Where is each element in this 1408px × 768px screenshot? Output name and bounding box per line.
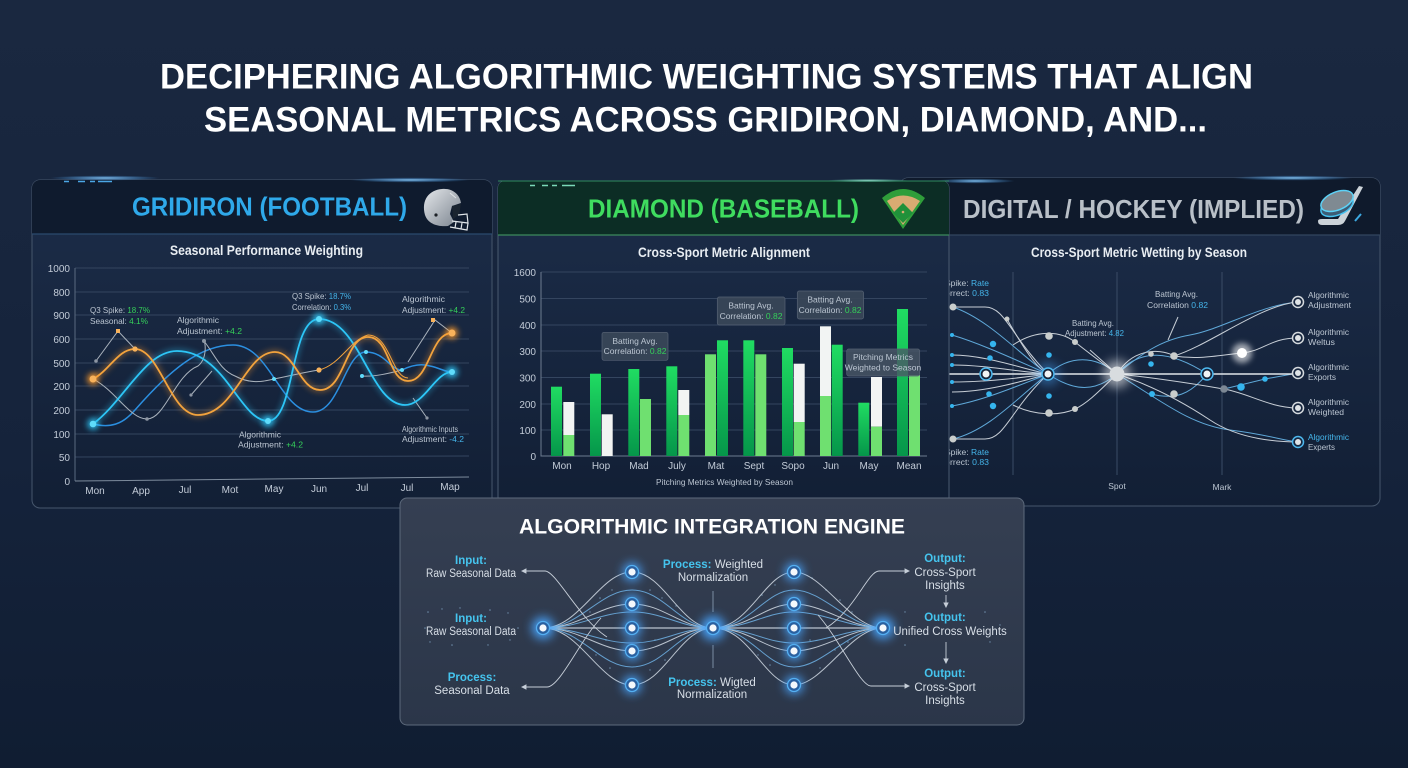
input labels: Raw Seasonal Data bbox=[426, 626, 517, 638]
x axis labels: Map bbox=[440, 482, 460, 493]
y axis labels: 50 bbox=[59, 453, 70, 464]
output labels: Insights bbox=[925, 695, 965, 707]
chart annotations: Seasonal: 4.1% bbox=[90, 316, 148, 326]
scattered particles bbox=[424, 577, 1001, 671]
series: cyan line bbox=[93, 319, 452, 424]
x axis caption: Pitching Metrics Weighted by Season bbox=[656, 477, 793, 487]
output labels: Output: bbox=[924, 612, 966, 624]
y axis labels: 500 bbox=[519, 294, 536, 306]
y axis labels: 400 bbox=[519, 321, 536, 332]
data points bbox=[87, 313, 458, 430]
y axis labels: 300 bbox=[519, 374, 536, 384]
arrows bbox=[522, 569, 948, 689]
chart annotations: Adjustment: +4.2 bbox=[238, 440, 303, 450]
x axis labels: Jun bbox=[823, 461, 839, 472]
y axis labels: 100 bbox=[519, 426, 536, 437]
icon: puck and stick bbox=[1318, 186, 1363, 225]
chart subtitle: Cross-Sport Metric Wetting by Season bbox=[1031, 244, 1247, 260]
x axis labels: Hop bbox=[592, 461, 611, 472]
network annotations: Algorithmic bbox=[1308, 432, 1350, 442]
panel heading: digital hockey: DIGITAL / HOCKEY (IMPLIED) bbox=[963, 194, 1304, 224]
callout: pitching metrics: Pitching Metrics bbox=[853, 352, 913, 362]
network annotations: Spike: Rate bbox=[945, 447, 989, 457]
x axis labels: Mean bbox=[896, 461, 922, 472]
chart grid and axes bbox=[75, 268, 469, 481]
chart annotations: Algorithmic bbox=[177, 315, 220, 325]
callout: batting avg 3: Batting Avg. bbox=[807, 294, 853, 304]
input labels: Process: bbox=[448, 672, 496, 684]
y axis labels: 800 bbox=[53, 288, 70, 299]
network annotations: Algorithmic bbox=[1308, 362, 1350, 372]
network annotations: Spot bbox=[1108, 481, 1126, 491]
panel: algorithmic integration engine bbox=[400, 498, 1024, 725]
panel heading: gridiron: GRIDIRON (FOOTBALL) bbox=[132, 192, 407, 222]
y axis labels: 0 bbox=[530, 452, 536, 463]
y axis labels: 1600 bbox=[514, 268, 536, 279]
process labels: Process: Wigted bbox=[668, 677, 756, 689]
chart annotations: Algorithmic Inputs bbox=[402, 424, 458, 434]
x axis labels: July bbox=[668, 461, 686, 472]
x axis labels: Mon bbox=[552, 461, 572, 472]
callout: pitching metrics: Weighted to Season bbox=[845, 362, 921, 372]
y axis labels: 0 bbox=[64, 477, 70, 488]
y axis labels: 200 bbox=[53, 382, 70, 393]
input labels bbox=[426, 555, 517, 697]
line chart bbox=[48, 264, 469, 497]
bars bbox=[551, 309, 920, 456]
x axis labels: Jul bbox=[356, 483, 368, 494]
y axis labels: 500 bbox=[53, 359, 70, 370]
network annotations: Correct: 0.83 bbox=[939, 288, 989, 298]
x axis labels: May bbox=[860, 461, 878, 472]
process labels bbox=[663, 559, 763, 701]
process labels: Normalization bbox=[677, 689, 747, 701]
x axis labels: Jul bbox=[179, 485, 191, 496]
network annotations: Batting Avg. bbox=[1155, 289, 1198, 299]
title: DECIPHERING ALGORITHMIC WEIGHTING SYSTEMS THAT ALIGN bbox=[160, 58, 1253, 96]
chart subtitle: Seasonal Performance Weighting bbox=[170, 242, 363, 258]
x axis labels: Sept bbox=[744, 461, 765, 472]
callout: pitching metrics bbox=[845, 349, 921, 376]
output labels: Output: bbox=[924, 668, 966, 680]
output labels: Cross-Sport bbox=[914, 567, 976, 579]
chart annotations: Algorithmic bbox=[402, 294, 446, 304]
input labels: Input: bbox=[455, 555, 487, 567]
network annotations: Algorithmic bbox=[1308, 397, 1350, 407]
process labels: Process: Weighted bbox=[663, 559, 763, 571]
network annotations: Adjustment: 4.82 bbox=[1065, 328, 1124, 338]
chart annotations: Correlation: 0.3% bbox=[292, 302, 351, 312]
network annotations: Algorithmic bbox=[1308, 290, 1350, 300]
network chart bbox=[940, 302, 1298, 442]
network nodes bbox=[950, 296, 1304, 448]
y axis labels bbox=[514, 268, 536, 463]
panel: digital hockey bbox=[900, 176, 1380, 506]
chart subtitle: Cross-Sport Metric Alignment bbox=[638, 244, 810, 260]
input labels: Input: bbox=[455, 613, 487, 625]
panel: gridiron bbox=[32, 176, 492, 508]
network annotations: Spike: Rate bbox=[945, 278, 989, 288]
network annotations: Adjustment bbox=[1308, 300, 1352, 310]
x axis labels: Jun bbox=[311, 484, 327, 495]
chart annotations: Adjustment: +4.2 bbox=[177, 326, 242, 336]
x axis labels: Mad bbox=[629, 461, 649, 472]
x axis labels: Mon bbox=[85, 486, 105, 497]
input labels: Seasonal Data bbox=[434, 685, 510, 697]
x axis labels: Jul bbox=[401, 483, 413, 494]
x axis labels: Mot bbox=[222, 485, 239, 496]
x axis labels: Sopo bbox=[781, 461, 805, 472]
panel: diamond bbox=[498, 179, 949, 504]
series: gray line bbox=[93, 320, 452, 419]
output labels: Insights bbox=[925, 580, 965, 592]
y axis labels: 100 bbox=[53, 430, 70, 441]
output labels: Unified Cross Weights bbox=[893, 626, 1007, 638]
network annotations: Exports bbox=[1308, 372, 1336, 382]
chart annotations: Q3 Spike: 18.7% bbox=[292, 291, 351, 301]
network annotations: Correlation 0.82 bbox=[1147, 300, 1208, 310]
callout: batting avg 1: Correlation: 0.82 bbox=[604, 346, 667, 356]
network annotations: Weighted bbox=[1308, 407, 1344, 417]
grid lines bbox=[541, 272, 927, 430]
network annotations bbox=[939, 278, 1352, 492]
callout: batting avg 1 bbox=[602, 332, 668, 360]
callout: batting avg 1: Batting Avg. bbox=[612, 336, 658, 346]
x axis labels: May bbox=[265, 484, 283, 495]
y axis labels: 1000 bbox=[48, 264, 70, 275]
title bbox=[160, 58, 1253, 140]
series glow bbox=[93, 319, 452, 424]
y axis labels bbox=[48, 264, 70, 488]
network annotations: Correct: 0.83 bbox=[939, 457, 989, 467]
x axis labels bbox=[552, 461, 922, 472]
callout: batting avg 2: Batting Avg. bbox=[728, 300, 774, 310]
y axis labels: 200 bbox=[53, 406, 70, 417]
output labels: Cross-Sport bbox=[914, 682, 976, 694]
network annotations: Mark bbox=[1213, 482, 1232, 492]
chart annotations: Adjustment: -4.2 bbox=[402, 434, 464, 444]
y axis labels: 200 bbox=[519, 400, 536, 411]
callout: batting avg 2 bbox=[717, 297, 785, 325]
x axis labels: App bbox=[132, 486, 150, 497]
chart annotations bbox=[90, 291, 465, 450]
chart annotations: Q3 Spike: 18.7% bbox=[90, 305, 150, 315]
network annotations: Weltus bbox=[1308, 337, 1335, 347]
x axis labels: Mat bbox=[708, 461, 725, 472]
network annotations: Algorithmic bbox=[1308, 327, 1350, 337]
series: orange line bbox=[93, 333, 452, 415]
panel heading: diamond: DIAMOND (BASEBALL) bbox=[588, 194, 859, 224]
output labels bbox=[893, 553, 1007, 707]
title: SEASONAL METRICS ACROSS GRIDIRON, DIAMOND, AND... bbox=[204, 100, 1207, 140]
process labels: Normalization bbox=[678, 572, 748, 584]
callout: batting avg 2: Correlation: 0.82 bbox=[720, 311, 783, 321]
callout: batting avg 3 bbox=[797, 291, 864, 319]
network annotations: Batting Avg. bbox=[1072, 318, 1114, 328]
neural network diagram bbox=[424, 563, 1001, 694]
series: blue line bbox=[93, 345, 452, 426]
nodes bbox=[536, 566, 890, 692]
chart annotations: Adjustment: +4.2 bbox=[402, 305, 465, 315]
node glows bbox=[532, 563, 894, 694]
output labels: Output: bbox=[924, 553, 966, 565]
y axis labels: 600 bbox=[53, 335, 70, 346]
engine heading: ALGORITHMIC INTEGRATION ENGINE bbox=[519, 516, 905, 538]
y axis labels: 900 bbox=[53, 311, 70, 322]
icon: football helmet bbox=[424, 189, 468, 230]
bar chart bbox=[514, 268, 927, 487]
chart annotations: Algorithmic bbox=[239, 430, 282, 440]
callout: batting avg 3: Correlation: 0.82 bbox=[799, 305, 862, 315]
network annotations: Experts bbox=[1308, 442, 1335, 452]
input labels: Raw Seasonal Data bbox=[426, 568, 517, 580]
x axis labels bbox=[85, 482, 460, 497]
network links bbox=[543, 572, 883, 685]
y axis labels: 300 bbox=[519, 347, 536, 358]
icon: baseball diamond bbox=[882, 189, 925, 229]
